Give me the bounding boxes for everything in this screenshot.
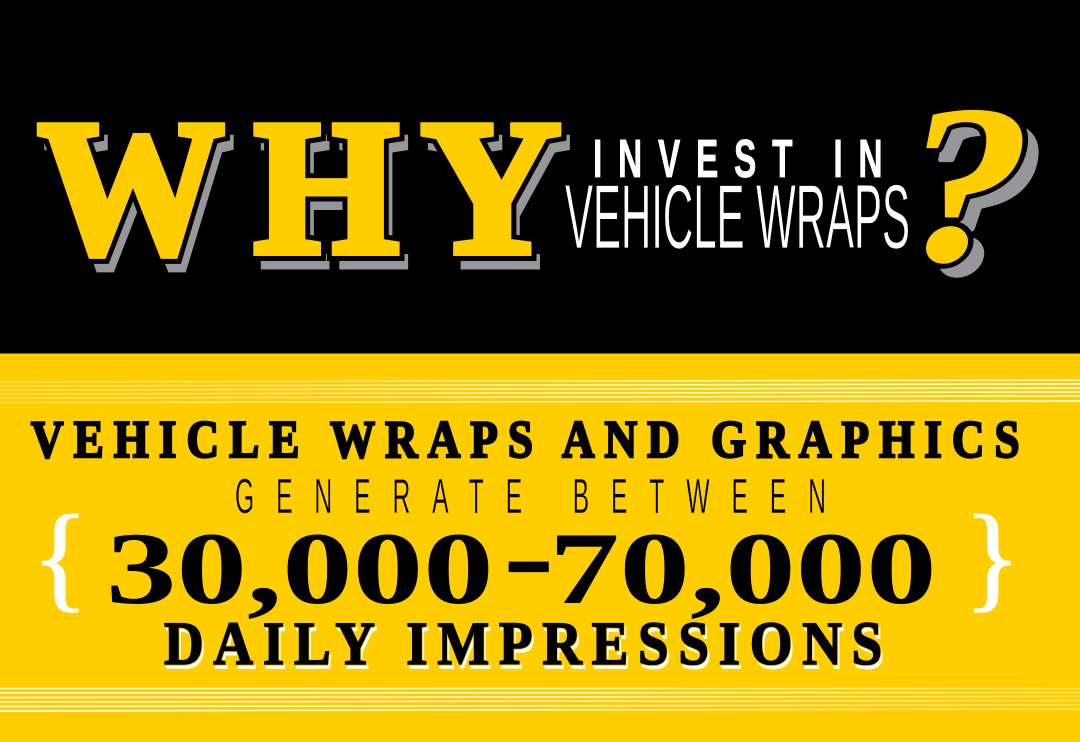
headline: vehicle wraps and graphics: VEHICLE WRAPS AND GRAPHICS	[31, 410, 1020, 469]
heading: WHY	[38, 80, 569, 307]
heading: WHY: W	[38, 80, 224, 294]
heading: WHY: Y	[429, 94, 569, 307]
headline: daily impressions: DAILY IMPRESSIONS	[164, 609, 882, 678]
heading: WHY: H	[254, 80, 399, 294]
heading: WHY: Y	[421, 81, 561, 294]
heading: WHY: Y	[421, 81, 561, 294]
key number: 30,000-70,000: 70,000	[549, 511, 937, 626]
heading: INVEST IN: INVEST IN	[593, 128, 883, 189]
panel: black header	[0, 0, 1080, 354]
headline: daily impressions: DAILY IMPRESSIONS	[164, 609, 882, 678]
headline: daily impressions: DAILY IMPRESSIONS	[166, 613, 884, 682]
icon: question mark: ?	[894, 70, 1068, 321]
panel: yellow lower section	[0, 354, 1080, 742]
decorative top line band	[0, 380, 1080, 402]
key number: 30,000-70,000: 30,000	[106, 511, 494, 626]
heading: WHY: W	[38, 80, 224, 294]
key number: 30,000-70,000: -	[503, 486, 554, 623]
subheading: generate between: GENERATE BETWEEN	[235, 470, 826, 524]
heading: WHY: H	[254, 80, 399, 294]
key number: 30,000-70,000	[106, 486, 937, 626]
icon: question mark: ?	[880, 58, 1054, 309]
right brace: }	[964, 491, 1021, 622]
decorative bottom line band	[0, 688, 1080, 711]
heading: WHY: W	[46, 93, 232, 307]
heading: WHY: H	[262, 93, 407, 307]
icon: question mark: ?	[880, 58, 1054, 309]
left brace: {	[32, 491, 89, 622]
